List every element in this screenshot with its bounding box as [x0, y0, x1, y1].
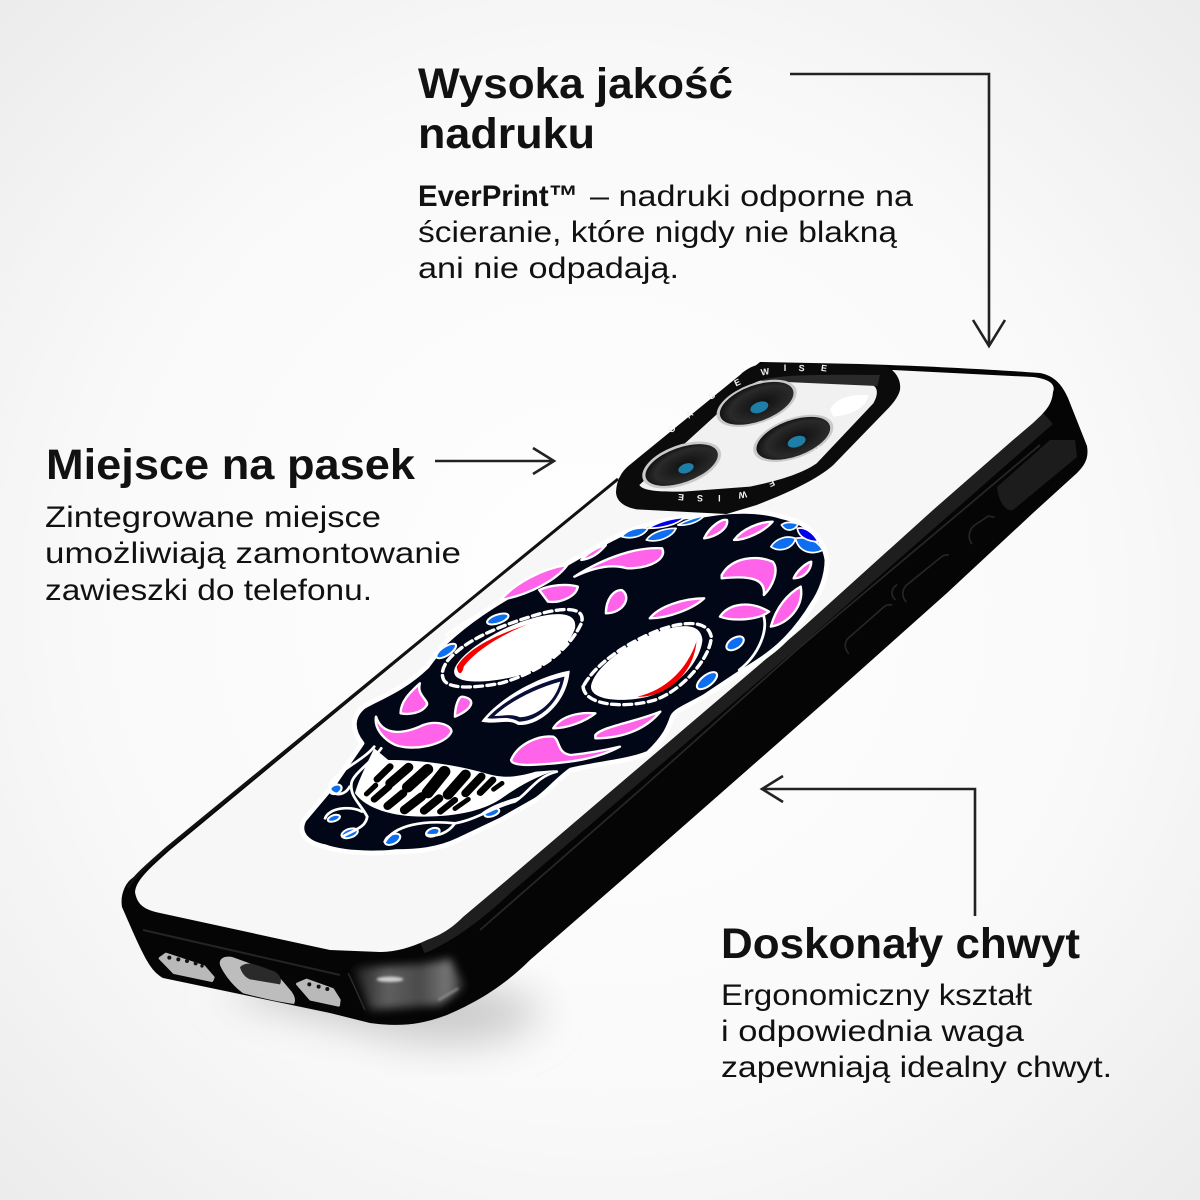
heading: print quality: Wysoka jakość — [418, 60, 733, 108]
brand text on ring: A — [684, 408, 696, 420]
brand text on ring: E — [733, 377, 742, 388]
blue flowers — [622, 516, 823, 553]
body: strap slot — [45, 501, 461, 607]
eyes — [442, 610, 711, 705]
camera glass — [639, 378, 877, 492]
left edge thin line — [128, 479, 618, 888]
lens left — [636, 432, 727, 498]
teeth — [355, 748, 557, 817]
brand text on ring: I — [718, 493, 721, 503]
body: print quality: ani nie odpadają. — [418, 252, 679, 285]
body: grip: zapewniają idealny chwyt. — [721, 1051, 1112, 1084]
text block: print quality — [418, 60, 913, 285]
white back face — [135, 370, 1054, 952]
brand text on ring: I — [784, 363, 786, 373]
pink petals — [376, 520, 811, 765]
brand text on ring — [666, 363, 846, 503]
body: print quality — [418, 180, 913, 285]
body: strap slot: Zintegrowane miejsce — [45, 501, 381, 534]
body: grip — [721, 979, 1112, 1084]
phone drop shadow — [220, 960, 545, 1044]
body: strap slot: umożliwiają zamontowanie — [45, 537, 461, 570]
heading: grip: Doskonały chwyt — [721, 920, 1080, 968]
brand text on ring: W — [737, 489, 748, 501]
body: strap slot: zawieszki do telefonu. — [45, 574, 372, 607]
body: print quality: EverPrint™ — [418, 180, 578, 213]
arrow: grip — [762, 776, 975, 916]
lens right — [747, 405, 840, 471]
text block: grip — [721, 920, 1112, 1084]
brand text on ring: A — [812, 444, 824, 456]
arrow: strap slot — [435, 448, 554, 474]
heading: print quality — [418, 60, 733, 158]
side buttons — [845, 516, 994, 653]
heading: strap slot: Miejsce na pasek — [46, 441, 415, 489]
body: print quality: – nadruki odporne na — [590, 180, 913, 213]
text block: strap slot — [45, 441, 461, 607]
phone case — [122, 362, 1088, 1025]
brand text on ring: C — [666, 423, 678, 435]
blue dots — [327, 611, 746, 847]
brand text on ring: C — [834, 427, 846, 439]
brand text on ring: S — [794, 462, 804, 473]
side edge bands — [143, 415, 1045, 975]
bottom ports — [160, 954, 339, 1005]
side patch near top corner — [997, 440, 1077, 510]
brand text on ring: E — [820, 363, 828, 374]
body: print quality: ścieranie, które nigdy nie blakną — [418, 216, 897, 249]
brand text on ring: S — [706, 390, 717, 402]
brand text on ring: S — [697, 493, 703, 503]
speaker right — [297, 980, 339, 1005]
lens top — [710, 370, 803, 436]
brand text on ring: S — [798, 363, 805, 373]
heading: print quality: nadruku — [418, 110, 595, 158]
brand text on ring: E — [767, 477, 776, 489]
speaker left — [160, 954, 213, 981]
camera bump — [616, 363, 900, 514]
corner sheen — [348, 958, 465, 1010]
case body — [122, 362, 1088, 1025]
charging port — [220, 957, 295, 1004]
body: grip: Ergonomiczny kształt — [721, 979, 1033, 1012]
flash — [830, 395, 868, 417]
arrow: print quality — [790, 74, 1005, 346]
brand text on ring: E — [678, 492, 684, 502]
sugar skull print — [302, 511, 827, 853]
brand text on ring: W — [760, 366, 771, 377]
body: grip: i odpowiednia waga — [721, 1015, 1024, 1048]
nose — [481, 671, 570, 725]
sticker outline and skull silhouette — [302, 511, 827, 853]
inner lip — [760, 375, 880, 386]
white swirl lines — [325, 605, 765, 842]
